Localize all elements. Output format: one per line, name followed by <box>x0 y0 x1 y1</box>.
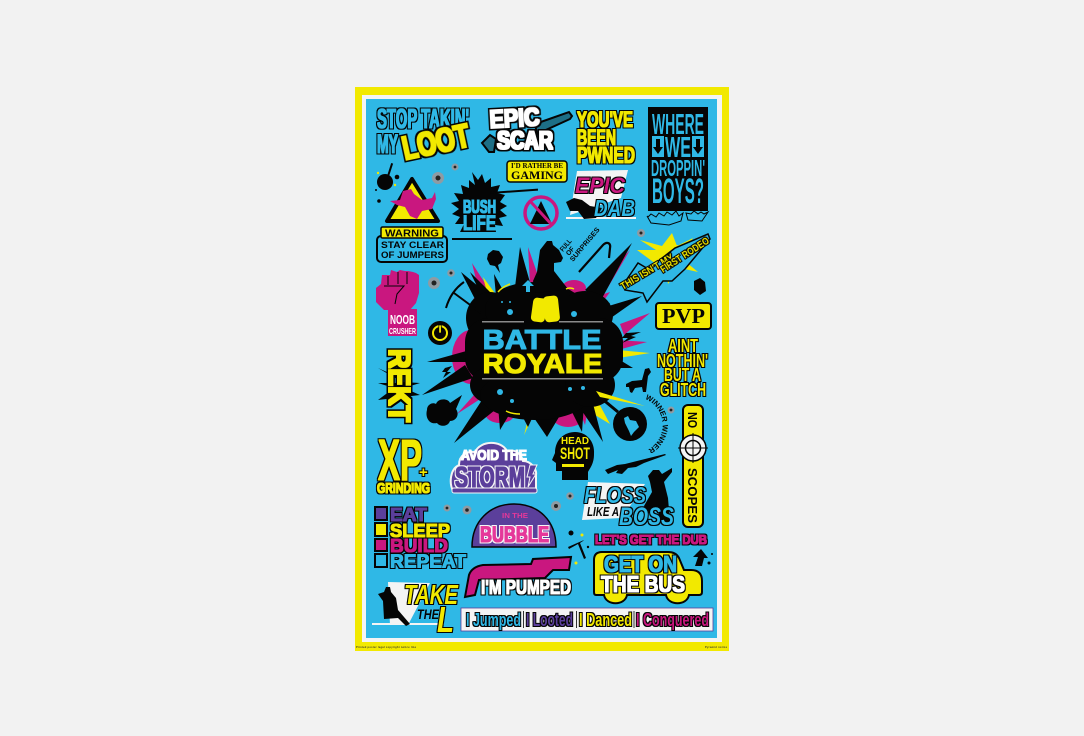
explosion pink splash <box>452 247 650 427</box>
text: epic scar with gun: EPIC <box>489 103 540 134</box>
title: battle royale: ROYALE <box>482 348 602 379</box>
noob crusher tag <box>388 309 417 336</box>
text: stop takin my loot: LOOT <box>399 117 473 167</box>
text: stop takin my loot <box>377 103 473 167</box>
strip: i jumped i looted i danced i conquered <box>461 608 713 631</box>
text: stop takin my loot: MY <box>377 129 398 159</box>
icon: power button <box>428 321 452 345</box>
badge: i'd rather be gaming <box>507 161 567 182</box>
dog tags <box>530 295 560 323</box>
sniper rifle <box>605 454 666 474</box>
small llama <box>626 368 651 393</box>
bus: get on the bus: GET ON <box>604 551 677 577</box>
strip: i jumped i looted i danced i conquered: I Looted <box>526 610 573 630</box>
text: you've been pwned: YOU'VE <box>577 107 633 132</box>
text: you've been pwned <box>577 107 635 168</box>
title: battle royale <box>482 324 602 379</box>
explosion black cloud <box>465 282 623 420</box>
dome: in the bubble <box>472 504 556 547</box>
poster background frame: Pyramid notice <box>705 646 728 649</box>
text: xp plus grinding: + <box>419 464 428 481</box>
dots and arrow icon <box>568 530 713 566</box>
strip: i jumped i looted i danced i conquered: I Jumped <box>466 610 521 630</box>
badge: i'd rather be gaming: I'D RATHER BE <box>511 162 563 170</box>
floss like a boss <box>582 468 674 531</box>
strip: i jumped i looted i danced i conquered: I Conquered <box>636 610 709 630</box>
title: battle royale: BATTLE <box>482 324 602 355</box>
icon: warning triangle <box>387 179 438 221</box>
winner winner pan: WINNER WINNER <box>646 394 668 453</box>
text: ain't nothin but a glitch: AINT <box>668 336 698 356</box>
list icons <box>375 507 387 567</box>
text: you've been pwned: BEEN <box>577 125 616 150</box>
burst speckle dots <box>497 301 585 403</box>
burst yellow arcs <box>498 284 574 414</box>
callout: this isn't my first rodeo: FIRST RODEO <box>658 235 712 276</box>
list: eat sleep build repeat: BUILD <box>390 536 448 556</box>
text: xp plus grinding <box>377 428 430 497</box>
gun barrel <box>535 112 572 134</box>
text: xp plus grinding: XP <box>378 428 422 493</box>
strip: i jumped i looted i danced i conquered: I Danced <box>579 610 632 630</box>
cloud: avoid the storm: STORM <box>455 462 525 494</box>
icon: no camping sign <box>525 197 557 229</box>
small arrow icon <box>522 280 534 292</box>
callout: this isn't my first rodeo <box>618 233 712 302</box>
panel: where we droppin boys: WE <box>665 132 691 164</box>
panel: where we droppin boys: DROPPIN' <box>651 155 705 181</box>
head shot silhouette <box>552 432 594 480</box>
smoke puff and lightning <box>426 332 641 426</box>
text: full of surprises: OF <box>565 245 577 257</box>
take the l <box>372 579 459 640</box>
text: epic dab <box>566 170 636 221</box>
cloud: avoid the storm: AVOID THE <box>461 447 527 464</box>
text: you've been pwned: PWNED <box>577 142 635 168</box>
dome: in the bubble: IN THE <box>502 511 528 520</box>
warning label: OF JUMPERS <box>381 250 444 260</box>
llama silhouette on burst <box>533 241 568 293</box>
text: epic dab: DAB <box>594 195 635 221</box>
text: ain't nothin but a glitch: NOTHIN' <box>657 351 708 371</box>
shotgun: i'm pumped <box>465 557 571 599</box>
text: xp plus grinding: GRINDING <box>377 480 430 497</box>
floss like a boss: LIKE A <box>587 504 619 519</box>
small tree and grenade <box>487 250 706 295</box>
winner winner pan <box>596 391 668 453</box>
text: let's get the dub: LET'S GET THE DUB <box>595 532 707 547</box>
callout: this isn't my first rodeo: THIS ISN'T MY <box>618 251 676 293</box>
text: epic dab: EPIC <box>575 173 626 198</box>
no scopes pill <box>678 405 708 527</box>
text: full of surprises: SURPRISES <box>569 226 602 263</box>
head shot silhouette: HEAD <box>561 436 589 447</box>
icon: crowbar <box>579 243 610 272</box>
badge: pvp: PVP <box>662 304 705 328</box>
warning label: STAY CLEAR <box>381 240 445 250</box>
poster background frame: Printed poster legal copyright notice line <box>356 646 417 649</box>
text: full of surprises: FULL <box>559 238 574 253</box>
cloud: avoid the storm <box>451 443 537 494</box>
list: eat sleep build repeat: SLEEP <box>390 521 450 541</box>
explosion black spikes <box>422 243 642 443</box>
text: rekt: REKT <box>382 349 417 422</box>
badge: pvp <box>656 303 711 329</box>
crosshair <box>680 435 706 461</box>
list: eat sleep build repeat: REPEAT <box>390 552 466 572</box>
text: ain't nothin but a glitch <box>657 336 708 400</box>
icon: fist: NOOB <box>390 312 415 327</box>
crowd of hands <box>647 211 708 225</box>
take the l: TAKE <box>404 579 459 610</box>
warning label <box>377 227 447 262</box>
pickaxe <box>446 282 481 313</box>
dab silhouette <box>566 198 602 219</box>
arrow icons <box>652 136 704 157</box>
icon: fist: CRUSHER <box>389 326 416 336</box>
take the l: THE <box>417 606 440 622</box>
bush life <box>451 172 538 240</box>
floss like a boss: FLOSS <box>584 482 647 508</box>
floss like a boss: BOSS <box>619 503 674 531</box>
bullet holes <box>428 164 674 514</box>
divider lines <box>482 321 603 380</box>
head shot silhouette: SHOT <box>560 444 590 463</box>
text: stop takin my loot: STOP TAKIN' <box>377 103 469 134</box>
bush life: BUSH <box>463 197 496 217</box>
list: eat sleep build repeat: EAT <box>390 505 427 525</box>
text: BOYS? <box>652 172 704 211</box>
text: ain't nothin but a glitch: GLITCH <box>660 380 706 400</box>
dome: in the bubble: BUBBLE <box>480 522 549 547</box>
explosion centrepiece <box>422 241 650 443</box>
no scopes pill: SCOPES <box>685 468 699 523</box>
panel: where we droppin boys <box>647 107 708 225</box>
panel: where we droppin boys: WHERE <box>652 109 704 141</box>
no scopes pill: NO <box>685 412 699 428</box>
icon: fist <box>376 270 419 336</box>
text: epic scar with gun: SCAR <box>497 127 553 155</box>
list: eat sleep build repeat <box>375 505 466 572</box>
shotgun: i'm pumped: I'M PUMPED <box>481 577 571 599</box>
badge: i'd rather be gaming: GAMING <box>511 168 563 182</box>
take the l: L <box>437 599 454 640</box>
text: ain't nothin but a glitch: BUT A <box>664 365 701 385</box>
warning label: WARNING <box>385 228 439 240</box>
text: epic scar with gun <box>482 103 572 155</box>
explosion yellow spikes <box>468 277 650 435</box>
chicken icon <box>624 416 639 436</box>
bus: get on the bus <box>594 551 702 603</box>
icon: bomb and dots <box>375 163 399 203</box>
bus: get on the bus: THE BUS <box>601 571 685 597</box>
bush life: LIFE <box>463 212 496 235</box>
